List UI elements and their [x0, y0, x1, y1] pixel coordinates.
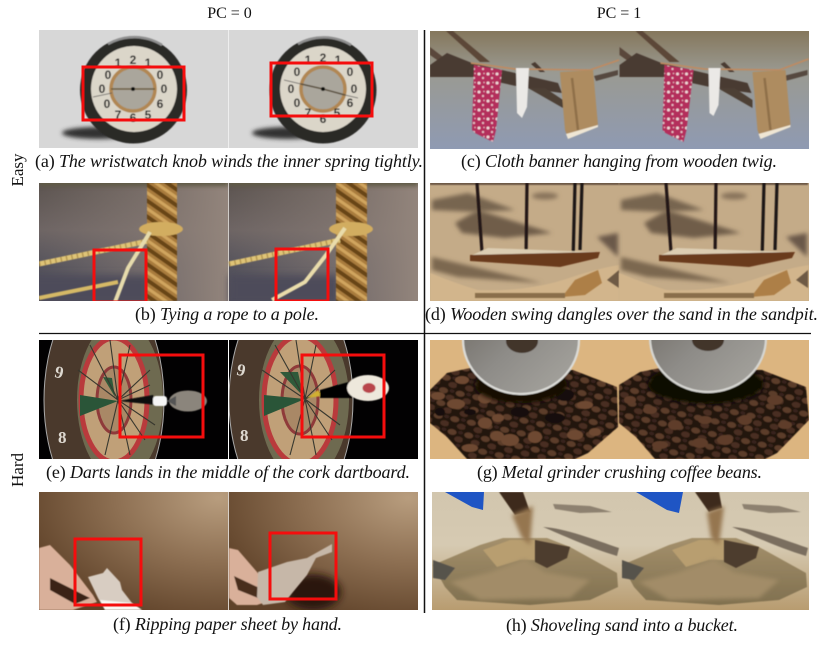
swing scene left	[430, 181, 619, 301]
clock left: 1	[115, 56, 122, 70]
clock right	[270, 36, 376, 144]
rope pole right	[229, 183, 373, 301]
coffee scene left	[430, 340, 619, 459]
panel e: dart right image	[229, 340, 418, 459]
clock right: 0	[294, 65, 301, 79]
panel b: rope images	[39, 183, 418, 301]
panel c: cloth images	[430, 31, 809, 149]
caption g: (g) Metal grinder crushing coffee beans.	[477, 462, 762, 483]
board numerals	[54, 366, 66, 443]
divider: vertical	[424, 30, 426, 613]
clock right: 0	[294, 96, 301, 110]
clock left: 0	[99, 82, 106, 96]
clock right: 0	[351, 82, 358, 96]
panel a: clock images	[39, 30, 418, 148]
clock right: 6	[347, 96, 354, 110]
clock left: 0	[157, 68, 164, 82]
column heading: PC = 1: PC = 1	[597, 5, 641, 22]
caption a: (a) The wristwatch knob winds the inner spring tightly.	[35, 151, 423, 172]
caption d: (d) Wooden swing dangles over the sand in the sandpit.	[425, 304, 818, 325]
red highlight box	[302, 355, 384, 437]
caption f: (f) Ripping paper sheet by hand.	[113, 614, 342, 635]
clock left: 6	[157, 97, 164, 111]
red highlight box	[276, 249, 328, 301]
clock left: 2	[130, 53, 137, 67]
panel g: coffee images	[430, 340, 809, 459]
clock right: 1	[335, 53, 342, 67]
cloth scene left	[430, 31, 619, 142]
rope pole left	[39, 183, 183, 302]
column heading: PC = 0: PC = 0	[207, 5, 252, 22]
clock right: 5	[334, 106, 341, 120]
clock left: 0	[161, 82, 168, 96]
clock left: 0	[105, 68, 112, 82]
panel h: sand images	[432, 492, 809, 610]
board numerals: 8	[58, 428, 66, 447]
clock right: 1	[305, 53, 312, 67]
red highlight box	[75, 539, 141, 605]
sand scene right	[622, 492, 808, 605]
clock left	[80, 36, 187, 144]
board numerals: 9	[53, 362, 65, 383]
red highlight box	[83, 67, 184, 120]
caption c: (c) Cloth banner hanging from wooden twig.	[461, 151, 777, 172]
clock right: 0	[347, 65, 354, 79]
caption h: (h) Shoveling sand into a bucket.	[506, 615, 738, 636]
cloth scene right	[620, 31, 808, 142]
caption e: (e) Darts lands in the middle of the cork dartboard.	[46, 462, 410, 483]
clock right: 6	[320, 112, 327, 126]
red highlight box	[120, 355, 203, 437]
clock right: 7	[305, 106, 312, 120]
board numerals: 9	[235, 360, 247, 380]
red highlight box	[271, 63, 372, 116]
sand scene left	[433, 492, 619, 605]
board numerals	[236, 364, 248, 441]
hand and paper left	[39, 545, 142, 610]
clock left: 5	[145, 108, 152, 122]
clock left: 0	[104, 97, 111, 111]
clock left: 1	[145, 56, 152, 70]
clock left: 6	[130, 111, 137, 125]
coffee scene right	[618, 340, 809, 459]
panel e: dart left image	[39, 340, 228, 459]
row label: Hard: Hard	[8, 453, 27, 487]
clock right: 2	[320, 51, 327, 65]
divider: horizontal	[39, 332, 811, 334]
hand and paper right	[285, 574, 341, 610]
row label: Easy: Easy	[8, 153, 27, 187]
panel d: swing images	[430, 181, 809, 301]
red highlight box	[270, 533, 336, 599]
red highlight box	[94, 250, 146, 302]
swing scene right	[619, 181, 809, 301]
panel f: paper tearing images	[39, 492, 418, 610]
board numerals: 8	[240, 426, 248, 445]
clock left: 7	[115, 108, 122, 122]
clock right: 0	[288, 82, 295, 96]
caption b: (b) Tying a rope to a pole.	[135, 304, 319, 325]
